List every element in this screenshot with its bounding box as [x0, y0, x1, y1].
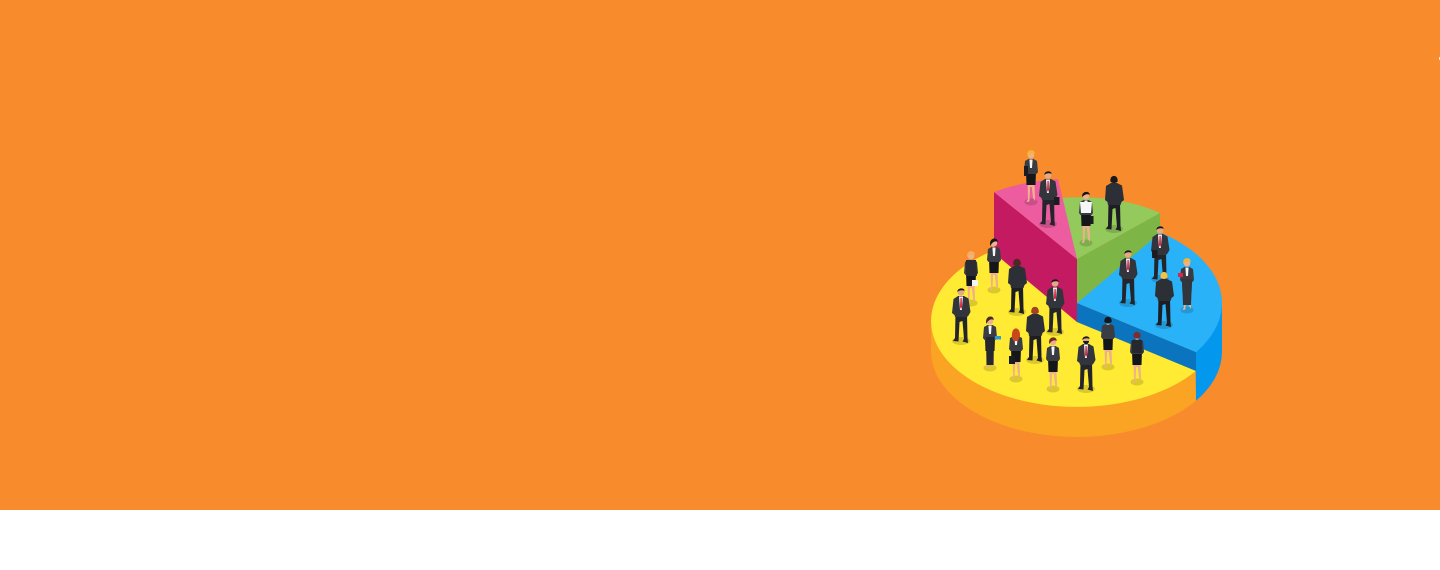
person: blonde woman with paper on yellow slice: [964, 251, 978, 306]
person: blond man from behind on blue slice: [1155, 272, 1174, 329]
pie slice: yellow side wall: [931, 321, 1196, 437]
person: man from behind with brown hair on yellow slice: [1008, 259, 1027, 316]
person: woman with blue tablet on yellow slice: [983, 316, 1001, 372]
pie slice: pink wall: [994, 192, 1077, 322]
person: man from behind with auburn hair on yellow slice: [1026, 307, 1045, 364]
pie slice: blue front wall: [1077, 303, 1196, 371]
pie slice: blue top: [1077, 232, 1222, 352]
person: man with folded arms near pink wall: [1046, 279, 1064, 336]
person: man with briefcase on pink slice: [1039, 171, 1060, 228]
pie slice: green top: [1060, 197, 1160, 259]
person: man with briefcase on blue slice: [1151, 226, 1170, 283]
pie slice: pink top: [994, 179, 1077, 259]
person: man from behind on green slice: [1105, 176, 1124, 233]
pie slice: yellow top: [931, 250, 1196, 407]
person: woman with folded arms on yellow slice: [1046, 337, 1060, 392]
person: woman in white shirt on green slice: [1079, 192, 1094, 246]
pie slice: blue right side: [1196, 303, 1222, 401]
person: man with red tie on blue slice: [1119, 250, 1138, 307]
person: bearded man on yellow slice: [1077, 336, 1096, 393]
person: man at left of yellow slice: [952, 288, 970, 345]
pie slice: green wall: [1077, 213, 1160, 303]
person: red-haired woman with bag on yellow slice: [1009, 328, 1023, 382]
person: woman from behind with dark hair on yellow slice: [1101, 317, 1115, 370]
person: blonde woman on pink slice: [1024, 150, 1038, 206]
small white edge mark: [1439, 57, 1440, 60]
person: woman with dark hair on yellow slice: [987, 238, 1001, 294]
person: blonde woman with red folder on blue slice: [1178, 258, 1194, 314]
person: woman on the phone on yellow slice: [1130, 332, 1144, 386]
